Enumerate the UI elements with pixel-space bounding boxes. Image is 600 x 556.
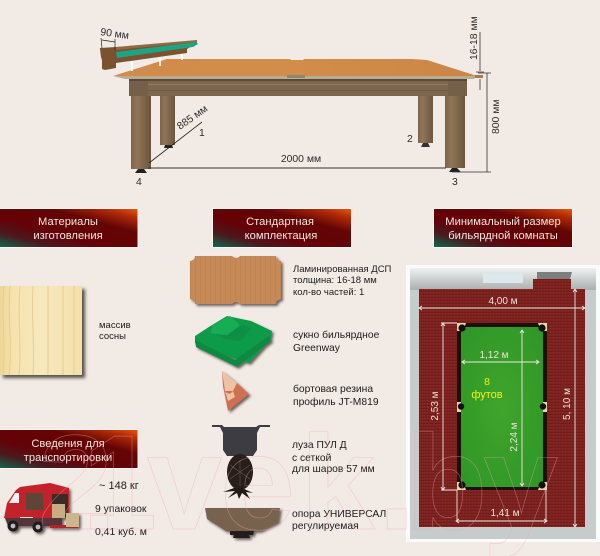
dimension lines (419, 289, 585, 527)
window (483, 273, 523, 283)
laminate board icon (190, 256, 281, 304)
foot label: регулируемая (292, 521, 359, 532)
dim: 90 mm (100, 27, 130, 50)
leg numbers: 2 (407, 134, 413, 145)
table size label (471, 376, 503, 401)
header: room size: Минимальный размер (445, 216, 561, 228)
transport labels: ~ 148 кг (99, 480, 139, 492)
table top (113, 59, 477, 76)
front leg left (131, 96, 151, 173)
laminate label (293, 264, 392, 298)
watermark: 21vek.by (38, 407, 558, 556)
pocket label (292, 440, 375, 475)
dim: 800 mm (452, 73, 502, 172)
room plan: 1,12 м (479, 350, 509, 361)
room plan: 2,53 м (430, 391, 441, 421)
table drawing (100, 16, 502, 188)
pocket icon (212, 425, 270, 499)
cushion rail (100, 40, 198, 70)
rubber label: бортовая резина (293, 383, 373, 395)
foot icon (205, 508, 280, 538)
table size label: 8 (484, 376, 490, 388)
header: materials: изготовления (33, 230, 103, 242)
cloth label: Greenway (293, 343, 341, 354)
cloth icon (195, 316, 272, 367)
back leg left (160, 96, 175, 148)
foot label: опора УНИВЕРСАЛ (292, 509, 386, 520)
leg numbers: 4 (136, 177, 142, 188)
white pins (132, 50, 182, 71)
header: standard set (212, 208, 352, 248)
transport labels: 0,41 куб. м (95, 526, 147, 538)
laminate label: толщина: 16-18 мм (293, 275, 377, 286)
laminate label: кол-во частей: 1 (293, 287, 364, 298)
truck icon (4, 483, 79, 532)
carpet (419, 279, 585, 527)
header: standard set: Стандартная (246, 216, 314, 228)
room plan (406, 265, 600, 542)
material label (99, 320, 131, 342)
dim: 885 mm: 885 мм (175, 104, 210, 132)
transport labels (95, 480, 147, 538)
table size label: футов (471, 389, 503, 401)
cloth label (293, 329, 380, 354)
pine sample (0, 286, 82, 375)
room frame (406, 265, 600, 542)
door (537, 272, 572, 279)
dim: 2000 mm: 2000 мм (281, 154, 321, 165)
header: room size (434, 208, 572, 248)
header: transport: транспортировки (24, 452, 112, 464)
room plan: 5, 10 м (562, 388, 573, 420)
cloth label: сукно бильярдное (293, 329, 380, 341)
pocket label: луза ПУЛ Д (292, 440, 347, 451)
dim: 16-18 mm: 16-18 мм (469, 16, 480, 60)
rubber icon (222, 371, 249, 411)
table frame (129, 79, 467, 96)
room plan: 2,24 м (509, 422, 520, 452)
back leg right (418, 96, 433, 147)
top edge (113, 76, 477, 79)
header: transport: Сведения для (31, 438, 105, 450)
size labels: 4,00 м (488, 296, 518, 307)
rubber label (293, 383, 379, 408)
header: standard set: комплектация (245, 230, 317, 242)
transport labels: 9 упаковок (95, 504, 147, 515)
pocket label: с сеткой (292, 453, 332, 464)
pocket label: для шаров 57 мм (292, 464, 375, 475)
billiard table (457, 323, 547, 490)
dim: 800 mm: 800 мм (491, 99, 502, 134)
dim: 885 mm (149, 104, 210, 163)
material label: сосны (99, 331, 126, 342)
room plan: 1,41 м (490, 508, 520, 519)
header: room size: бильярдной комнаты (448, 230, 558, 242)
leg numbers: 1 (199, 128, 205, 139)
material label: массив (99, 320, 131, 331)
laminate label: Ламинированная ДСП (293, 264, 392, 275)
front leg right (445, 96, 465, 172)
leg numbers (136, 128, 458, 188)
header: transport (0, 430, 138, 468)
header: materials: Материалы (38, 216, 98, 228)
leg numbers: 3 (452, 177, 458, 188)
rubber label: профиль JT-M819 (293, 396, 379, 408)
foot label (292, 509, 386, 532)
dim: 16-18 mm (469, 16, 484, 90)
header: materials (0, 208, 138, 248)
dim: 90 mm: 90 мм (100, 27, 130, 42)
